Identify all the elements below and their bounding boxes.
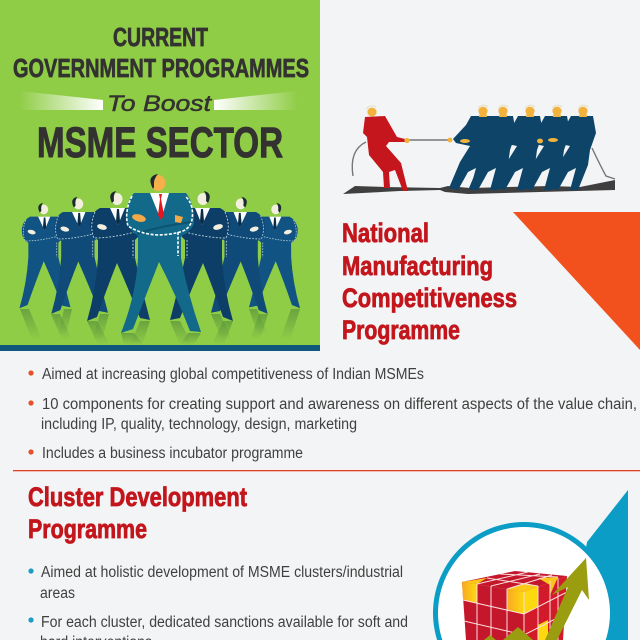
title: GOVERNMENT PROGRAMMES — [13, 53, 309, 83]
side man far right — [249, 203, 300, 308]
bullet list: national programme — [28, 366, 637, 462]
bullet list: national programme: Aimed at increasing global competitiveness of Indian MSMEs — [42, 366, 424, 383]
bullet list: cluster programme: For each cluster, dedicated sanctions available for soft and — [41, 614, 408, 631]
heading: National Manufacturing Competitiveness Programme — [342, 218, 517, 345]
title: To Boost — [107, 91, 213, 116]
hero base bar — [0, 345, 320, 351]
heading: National Manufacturing Competitiveness Programme: Manufacturing — [342, 251, 493, 281]
title — [13, 22, 309, 167]
icon: cube and growth arrow in circle — [433, 490, 628, 640]
red puller — [363, 106, 410, 191]
heading: National Manufacturing Competitiveness Programme: National — [342, 218, 429, 248]
central leader — [121, 174, 201, 333]
side man second right — [211, 197, 268, 314]
cube — [462, 571, 567, 640]
side man third right — [170, 191, 233, 321]
side man second left — [51, 197, 108, 314]
heading: National Manufacturing Competitiveness Programme: Programme — [342, 315, 460, 345]
bullet list: national programme: Includes a business incubator programme — [42, 445, 303, 462]
title: CURRENT — [113, 22, 208, 52]
heading: Cluster Development Programme: Cluster Development — [28, 482, 247, 512]
ground shadow — [343, 180, 615, 194]
bullet list: cluster programme — [28, 564, 408, 640]
bullet list: cluster programme: Aimed at holistic development of MSME clusters/industrial — [41, 564, 403, 581]
rope — [352, 140, 615, 179]
blue team — [449, 105, 596, 190]
circle — [433, 522, 615, 640]
growth arrow — [484, 558, 589, 640]
side man far left — [19, 203, 70, 308]
hands — [448, 138, 558, 143]
side man third left — [87, 191, 150, 321]
reflections — [20, 309, 300, 345]
bullet list: cluster programme: areas — [40, 585, 75, 602]
blue triangle — [570, 490, 628, 640]
illustration: tug of war — [343, 105, 615, 194]
panel: green hero — [0, 0, 320, 351]
heading: National Manufacturing Competitiveness Programme: Competitiveness — [342, 283, 517, 313]
heading: Cluster Development Programme: Programme — [28, 514, 147, 544]
title: MSME SECTOR — [37, 119, 283, 167]
bullet list: national programme: including IP, quality, technology, design, marketing — [41, 416, 357, 433]
heading: Cluster Development Programme — [28, 482, 247, 544]
illustration: business team with crossed arms — [19, 174, 300, 345]
decoration: orange triangle — [513, 212, 640, 350]
